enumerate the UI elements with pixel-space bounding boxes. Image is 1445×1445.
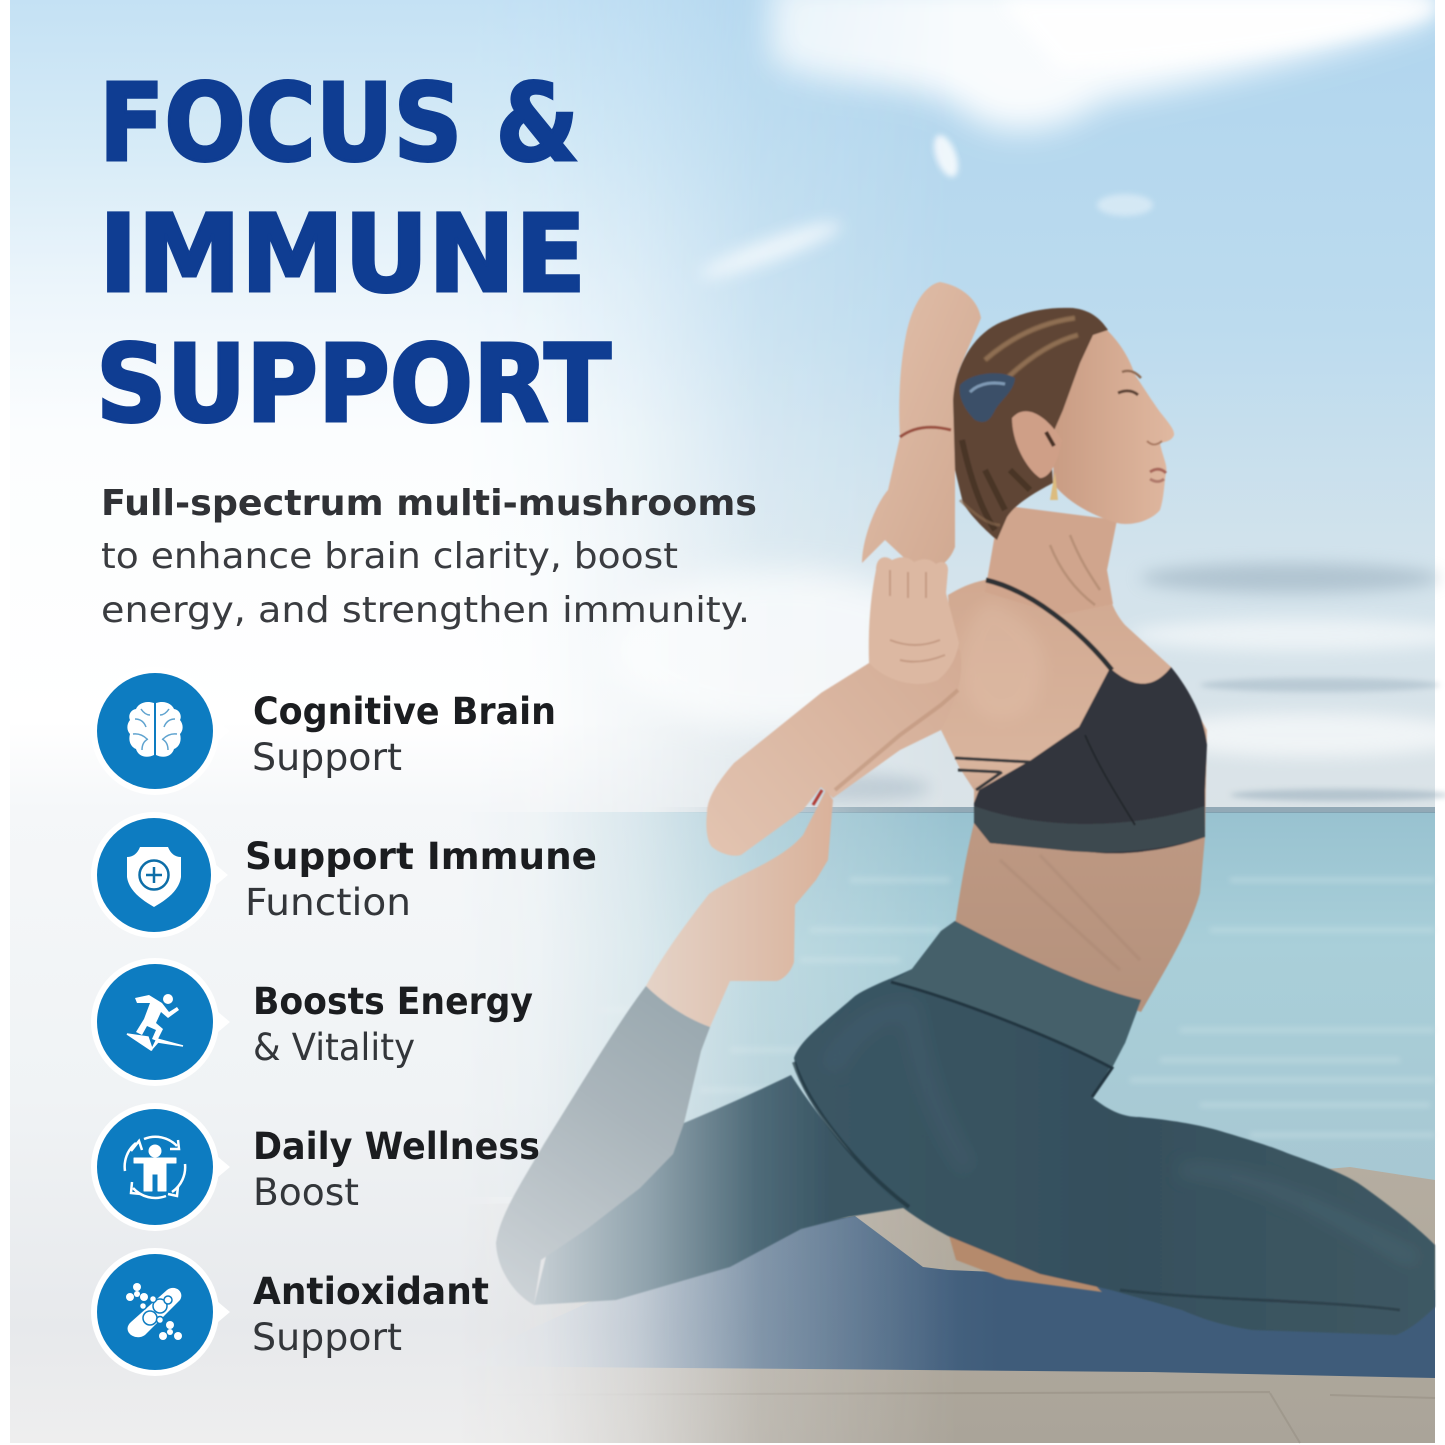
benefit: daily wellness boost [91, 1103, 540, 1231]
icon: capsule with molecules [91, 1248, 230, 1376]
front arm and elbow [706, 640, 961, 856]
legging creases and highlights [794, 1062, 909, 1207]
intro text [101, 483, 757, 631]
torso [941, 560, 1207, 1012]
neck [985, 505, 1117, 615]
icon: shield with plus [91, 812, 228, 938]
benefit: daily wellness boost: Daily Wellness [253, 1125, 540, 1168]
title: IMMUNE [99, 193, 586, 317]
left white fade over photo [10, 0, 970, 1443]
icon: brain [91, 667, 230, 795]
title: SUPPORT [96, 323, 611, 447]
benefit: boosts energy and vitality: & Vitality [253, 1026, 415, 1069]
foot and ankle [646, 790, 833, 1027]
face [1053, 328, 1174, 524]
benefit: support immune function: Function [245, 881, 411, 924]
benefit: cognitive brain support: Support [252, 736, 402, 779]
waistband [891, 921, 1141, 1068]
hair [953, 308, 1108, 540]
icon: person with cycle arrows [91, 1103, 230, 1231]
earring [1050, 472, 1058, 500]
benefit: daily wellness boost: Boost [253, 1171, 359, 1214]
benefit: boosts energy and vitality [91, 958, 533, 1086]
hip and front thigh legging [794, 921, 1435, 1335]
benefit: cognitive brain support [91, 667, 556, 795]
title: FOCUS & [99, 62, 579, 186]
title [96, 62, 611, 447]
rear shin legging [496, 986, 710, 1305]
intro text: energy, and strengthen immunity. [101, 590, 750, 631]
benefit: boosts energy and vitality: Boosts Energy [253, 980, 533, 1023]
benefit: antioxidant support: Support [252, 1316, 402, 1359]
back shading [960, 600, 1044, 720]
woman in yoga pose [496, 282, 1435, 1335]
facial details [1118, 371, 1166, 482]
icon: runner [91, 958, 230, 1086]
palm and fingers [869, 557, 959, 684]
benefit: antioxidant support: Antioxidant [253, 1270, 489, 1313]
rear raised arm and hand [862, 282, 981, 570]
benefit: cognitive brain support: Cognitive Brain [253, 690, 556, 733]
hair clip [960, 373, 1015, 422]
bra [955, 580, 1207, 853]
intro text: to enhance brain clarity, boost [101, 536, 678, 577]
ear [1012, 411, 1062, 478]
benefit: support immune function: Support Immune [245, 835, 597, 878]
rear thigh legging [534, 1075, 909, 1305]
bracelet [900, 427, 951, 437]
benefit: antioxidant support [91, 1248, 489, 1376]
intro text: Full-spectrum multi-mushrooms [101, 483, 757, 524]
toenail [813, 790, 822, 805]
benefit: support immune function [91, 812, 597, 938]
tucked foot [946, 1225, 1102, 1292]
yoga mat [450, 1216, 1435, 1378]
